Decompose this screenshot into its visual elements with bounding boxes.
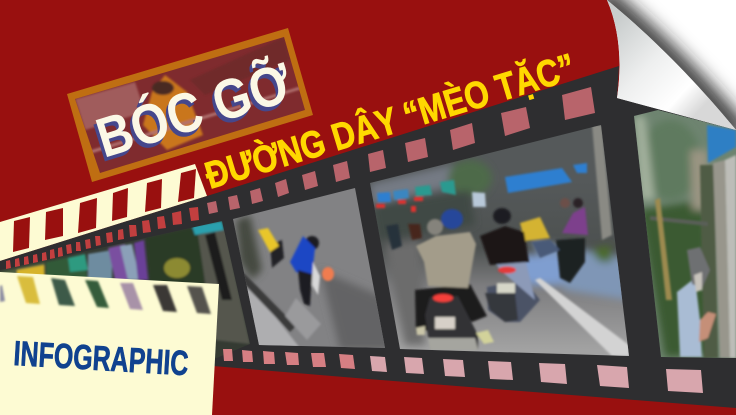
INFOGRAPHIC label: INFOGRAPHIC bbox=[13, 334, 190, 383]
photo: colourful street scene bbox=[0, 221, 250, 358]
small film frames bbox=[0, 276, 211, 314]
BOC GO heading: BÓC GỠ bbox=[89, 50, 299, 169]
photo: two motorbikes at night bbox=[365, 120, 635, 360]
yellow headline: ĐƯỜNG DÂY “MÈO TẶC” bbox=[200, 45, 580, 198]
cream panel bbox=[0, 272, 219, 415]
upper film sprocket holes bbox=[6, 87, 595, 269]
BOC GO heading: BÓC GỠ bbox=[87, 54, 296, 174]
photo: man at drain cover bbox=[233, 188, 385, 348]
frame photo bbox=[75, 37, 305, 155]
photo: man with phone by trees bbox=[630, 105, 736, 360]
page curl flap bbox=[607, 0, 736, 130]
page curl corner bbox=[600, 0, 736, 136]
title frame with photo bbox=[67, 28, 313, 182]
clapper red stripes bbox=[13, 169, 196, 252]
lower film sprocket holes bbox=[223, 349, 703, 393]
cream clapper stripe bbox=[0, 164, 207, 261]
